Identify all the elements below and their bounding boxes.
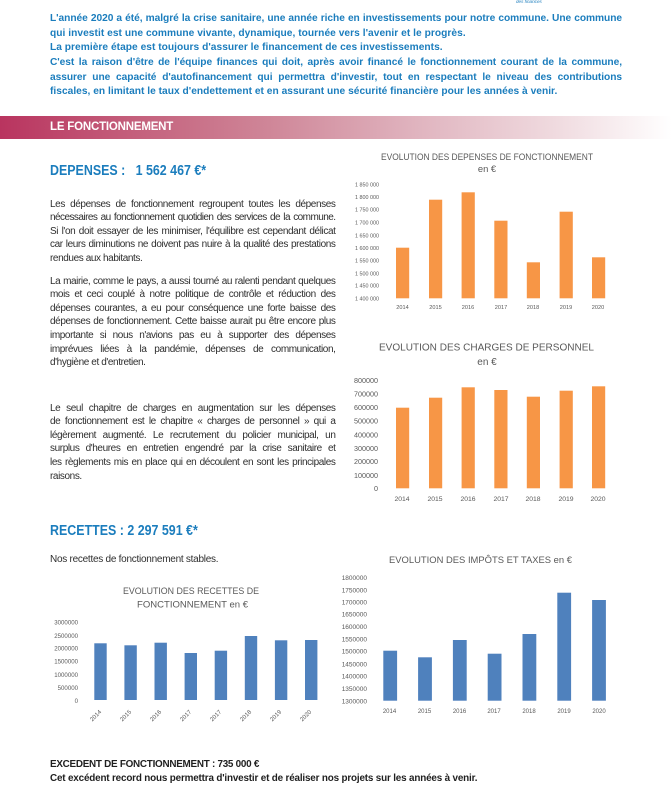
chart: evolution des depenses de fonctionnement: 1 650 000 (355, 234, 379, 240)
chart: evolution des charges de personnel: 600000 (354, 403, 378, 412)
chart: evolution des depenses de fonctionnement: 1 700 000 (355, 220, 379, 226)
chart: evolution des impots et taxes: 1550000 (342, 636, 367, 644)
section banner: le fonctionnement: LE FONCTIONNEMENT (50, 121, 173, 133)
text: recettes: Nos recettes de fonctionnement stables. (50, 554, 218, 565)
conclusion: excedent de fonctionnement: Cet excédent record nous permettra d'investir et de réaliser nos projets sur les années à venir. (50, 773, 477, 784)
chart: evolution des recettes de fonctionnement: 3000000 (54, 620, 79, 626)
chart: evolution des depenses de fonctionnement: 2015 (429, 305, 442, 311)
text: depenses paragraph 2: dépenses courantes, a eu pour conséquence une forte baisse des (50, 303, 336, 314)
chart: evolution des impots et taxes: 1600000 (342, 624, 367, 631)
text: depenses paragraph 1: Si l'on doit essayer de les minimiser, l'équilibre est cependant délicat (50, 226, 336, 237)
text: depenses paragraph 2: La mairie, comme le pays, a aussi tourné au ralenti pendant quelques (50, 276, 336, 286)
chart: evolution des charges de personnel: EVOLUTION DES CHARGES DE PERSONNEL (379, 342, 594, 354)
text: depenses paragraph 3 (50, 402, 336, 482)
intro text: qui investit est une commune vivante, dynamique, tournée vers l'avenir et le progrès. (50, 28, 466, 39)
chart: evolution des depenses de fonctionnement: 2014 (396, 305, 409, 311)
chart: evolution des depenses de fonctionnement: 2016 (462, 305, 474, 311)
chart: evolution des impots et taxes: 1800000 (342, 575, 367, 582)
text: depenses paragraph 3: les règlements mis en place qui en découlent en sont les principales (50, 457, 336, 468)
intro text: fiscales, en limitant le taux d'endettement et en assurant une sécurité financière pour les années à venir. (50, 86, 557, 97)
chart: evolution des impots et taxes: 2016 (453, 709, 467, 715)
intro text: La première étape est toujours d'assurer le financement de ces investissements. (50, 42, 443, 53)
chart: evolution des charges de personnel: 2018 (525, 496, 541, 503)
chart: evolution des impots et taxes: 1650000 (342, 612, 367, 618)
chart: evolution des recettes de fonctionnement: 2020 (299, 709, 314, 723)
text: depenses paragraph 2: d'hygiène et d'entretien. (50, 357, 146, 368)
chart: evolution des charges de personnel: 2015 (427, 496, 443, 503)
heading: recettes: RECETTES : 2 297 591 €* (50, 523, 198, 539)
text: depenses paragraph 3: surplus d'heures en entretien engendré par la crise sanitaire et (50, 443, 336, 454)
chart: evolution des impots et taxes: 1500000 (342, 648, 367, 656)
chart: evolution des depenses de fonctionnement: 1 750 000 (355, 208, 379, 214)
chart: evolution des impots et taxes: 1700000 (342, 600, 367, 606)
chart: evolution des impots et taxes: 1750000 (342, 588, 367, 594)
chart: evolution des charges de personnel: en € (477, 357, 497, 368)
chart: evolution des recettes de fonctionnement: 2018 (239, 709, 254, 723)
text: depenses paragraph 2: mois et ceci couplé à notre politique de contrôle et réduction des (50, 289, 336, 300)
chart: evolution des depenses de fonctionnement: en € (478, 163, 497, 174)
text: depenses paragraph 1: nécessaires au fonctionnement quotidien des services de la commune. (50, 212, 336, 223)
chart: evolution des impots et taxes: 2018 (522, 709, 536, 715)
intro text: C'est la raison d'être de l'équipe finances qui doit, après avoir financé le fonctionnement courant de la commune, (50, 57, 622, 68)
chart: evolution des depenses de fonctionnement: 2017 (495, 305, 507, 311)
text: depenses paragraph 2 (50, 276, 336, 368)
conclusion: excedent de fonctionnement: EXCEDENT DE FONCTIONNEMENT : 735 000 € (50, 758, 259, 770)
chart: evolution des depenses de fonctionnement: 1 450 000 (355, 284, 379, 290)
chart: evolution des depenses de fonctionnement: 1 500 000 (355, 272, 379, 278)
chart: evolution des recettes de fonctionnement: 1500000 (54, 658, 79, 666)
chart: evolution des impots et taxes: 2014 (383, 709, 397, 715)
text: depenses paragraph 2: imprévues liées à la pandémie, dépenses de communication, (50, 344, 336, 355)
chart: evolution des recettes de fonctionnement: 2000000 (54, 646, 79, 652)
chart: evolution des impots et taxes: 2019 (557, 709, 571, 715)
chart: evolution des depenses de fonctionnement: 2020 (592, 305, 604, 311)
intro text (50, 13, 622, 97)
text: depenses paragraph 3: raisons. (50, 471, 82, 482)
chart: evolution des recettes de fonctionnement: 2017 (179, 709, 194, 723)
heading: depenses: DEPENSES : 1 562 467 €* (50, 163, 206, 179)
chart: evolution des charges de personnel: 2019 (558, 496, 574, 503)
chart: evolution des charges de personnel: 0 (374, 484, 378, 493)
conclusion: excedent de fonctionnement (50, 758, 477, 784)
chart: evolution des recettes de fonctionnement: 2016 (149, 709, 164, 723)
intro text: assurer une capacité d'autofinancement qui permettra d'investir, tout en respectant le niveau des contributions (50, 72, 622, 83)
chart: evolution des charges de personnel: 100000 (354, 471, 378, 480)
chart: evolution des impots et taxes: 1400000 (342, 674, 367, 680)
chart: evolution des depenses de fonctionnement: 1 600 000 (355, 246, 379, 252)
chart: evolution des depenses de fonctionnement: 1 400 000 (355, 296, 379, 302)
chart: evolution des impots et taxes: 1350000 (342, 686, 367, 693)
chart: evolution des charges de personnel: 2016 (460, 496, 476, 503)
chart: evolution des recettes de fonctionnement: 0 (75, 698, 79, 705)
text: depenses paragraph 1: Les dépenses de fonctionnement regroupent toutes les dépenses (50, 198, 336, 210)
text: depenses paragraph 3: légèrement augmenté. Le recrutement du policier municipal, un (50, 430, 336, 441)
text: depenses paragraph 1: rendues aux habitants. (50, 253, 142, 264)
intro text: L'année 2020 a été, malgré la crise sanitaire, une année riche en investissements pour notre commune. Une commune (50, 13, 622, 24)
section banner: le fonctionnement (0, 116, 672, 139)
text: depenses paragraph 3: de fonctionnement est le chapitre « charges de personnel » qui a (50, 416, 336, 427)
text: depenses paragraph 2: importante si nous n'avions pas eu à supporter des dépenses (50, 330, 336, 341)
chart: evolution des recettes de fonctionnement: 1000000 (54, 672, 79, 679)
text: depenses paragraph 2: dépenses de fonctionnement. Cette baisse aurait pu être encore plus (50, 316, 336, 327)
chart: evolution des impots et taxes: 1450000 (342, 662, 367, 668)
text: depenses paragraph 1: car leurs diminutions ne doivent pas nuire à la qualité des prestations (50, 239, 336, 250)
chart: evolution des charges de personnel: 2014 (394, 496, 410, 503)
chart: evolution des depenses de fonctionnement: 1 550 000 (355, 258, 379, 264)
text: depenses paragraph 1 (50, 198, 336, 264)
chart: evolution des charges de personnel: 2017 (493, 496, 509, 503)
chart: evolution des charges de personnel: 700000 (354, 390, 378, 398)
chart: evolution des charges de personnel: 200000 (354, 457, 378, 466)
chart: evolution des recettes de fonctionnement: FONCTIONNEMENT en € (137, 598, 249, 610)
chart: evolution des depenses de fonctionnement: 2019 (560, 305, 572, 311)
chart: evolution des depenses de fonctionnement: 1 850 000 (355, 182, 379, 188)
chart: evolution des impots et taxes: 2020 (592, 709, 606, 715)
chart: evolution des depenses de fonctionnement: 2018 (527, 305, 539, 311)
chart: evolution des impots et taxes: 2017 (487, 709, 501, 715)
chart: evolution des recettes de fonctionnement: 2015 (119, 709, 134, 723)
chart: evolution des impots et taxes: 2015 (418, 709, 432, 715)
text: depenses paragraph 3: Le seul chapitre de charges en augmentation sur les dépenses (50, 402, 336, 414)
chart: evolution des recettes de fonctionnement: 500000 (58, 685, 79, 692)
chart: evolution des depenses de fonctionnement: 1 800 000 (355, 195, 379, 201)
chart: evolution des charges de personnel: 2020 (590, 496, 606, 503)
chart: evolution des charges de personnel: 300000 (354, 444, 378, 453)
chart: evolution des recettes de fonctionnement: 2017 (209, 709, 224, 723)
chart: evolution des impots et taxes: EVOLUTION DES IMPÔTS ET TAXES en € (389, 555, 573, 566)
chart: evolution des recettes de fonctionnement: 2019 (269, 709, 284, 723)
chart: evolution des depenses de fonctionnement: EVOLUTION DES DEPENSES DE FONCTIONNEMENT (381, 151, 593, 162)
chart: evolution des recettes de fonctionnement: EVOLUTION DES RECETTES DE (123, 585, 259, 596)
chart: evolution des charges de personnel: 500000 (354, 416, 378, 426)
chart: evolution des recettes de fonctionnement: 2500000 (54, 633, 79, 640)
chart: evolution des recettes de fonctionnement: 2014 (89, 709, 104, 723)
chart: evolution des charges de personnel: 800000 (354, 376, 378, 385)
chart: evolution des impots et taxes: 1300000 (342, 698, 367, 706)
chart: evolution des charges de personnel: 400000 (354, 430, 378, 440)
